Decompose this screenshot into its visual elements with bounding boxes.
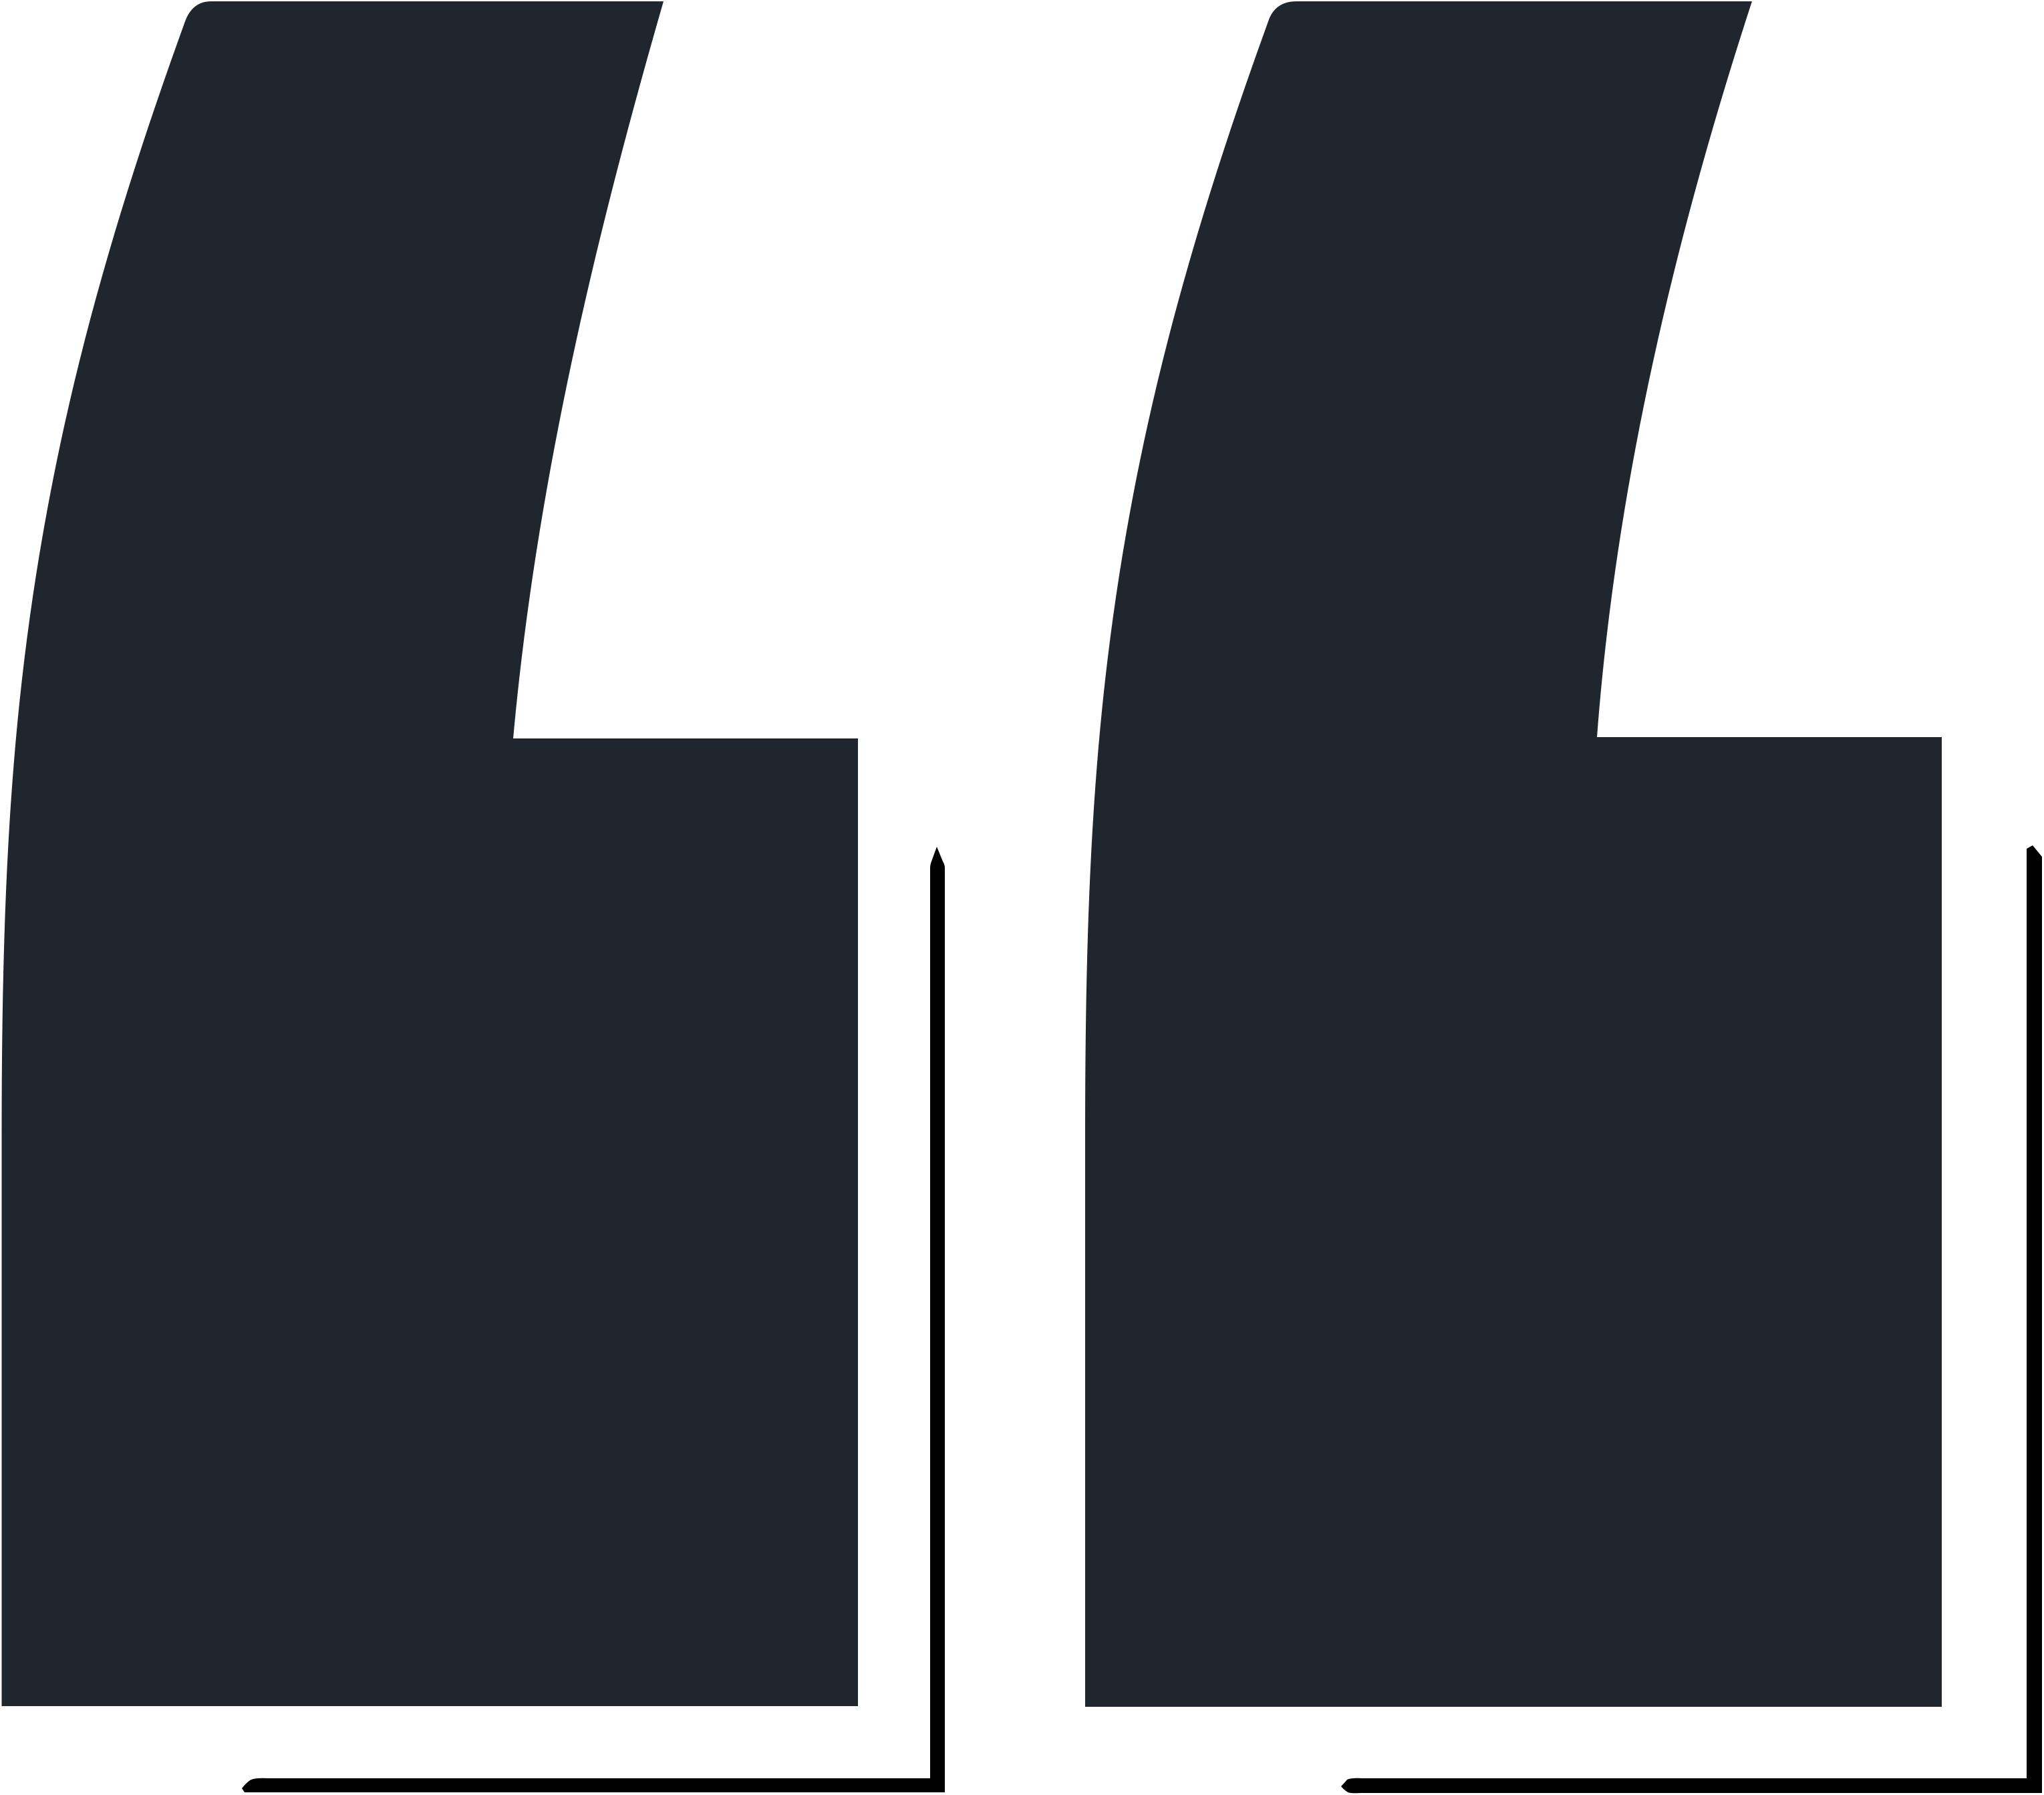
- left quote L-shaped shadow line: [242, 847, 945, 1792]
- right quote body: [1085, 1, 1942, 1707]
- left quote body: [1, 1, 858, 1706]
- right quote L-shaped shadow line: [1341, 845, 2042, 1793]
- icon: left quotation mark: [1, 1, 945, 1792]
- icon: right quotation mark: [1085, 1, 2042, 1793]
